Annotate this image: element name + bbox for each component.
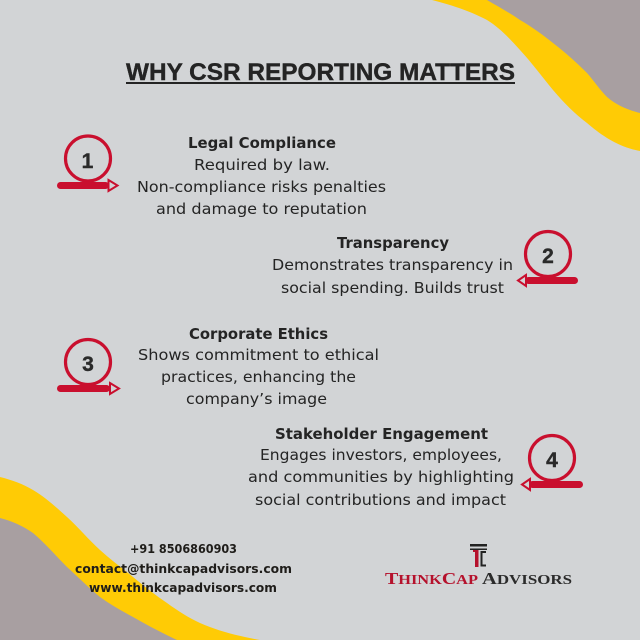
item 4 text: stakeholder engagement: Engages investors, employees, <box>260 446 502 464</box>
item 1 icon: numbered circle with right arrow: 1 <box>82 150 94 173</box>
item 4 text: stakeholder engagement: and communities by highlighting <box>248 468 514 486</box>
contact details: +91 8506860903 <box>130 542 237 556</box>
item 2 text: transparency: Demonstrates transparency in <box>272 256 513 274</box>
logo: ThinkCap Advisors <box>385 544 572 588</box>
icon: logo mark <box>470 544 487 567</box>
item 1 text: legal compliance: Non-compliance risks penalties <box>137 178 386 196</box>
item 2 text: transparency: Transparency <box>337 234 449 252</box>
item 1 text: legal compliance: Legal Compliance <box>188 134 336 152</box>
contact details: www.thinkcapadvisors.com <box>89 581 277 595</box>
item 4 text: stakeholder engagement: social contributions and impact <box>255 491 506 509</box>
item 3 text: corporate ethics: Corporate Ethics <box>189 325 328 343</box>
item 1 text: legal compliance: and damage to reputation <box>156 200 367 218</box>
title: WHY CSR REPORTING MATTERS <box>126 59 515 86</box>
item 1 icon: numbered circle with right arrow <box>57 136 118 191</box>
item 4 text: stakeholder engagement <box>248 425 514 509</box>
contact details: contact@thinkcapadvisors.com <box>75 562 292 576</box>
contact details <box>75 542 292 595</box>
item 2 text: transparency: social spending. Builds trust <box>281 279 504 297</box>
decoration: bottom-left wave <box>0 477 260 640</box>
item 1 text: legal compliance <box>137 134 386 218</box>
item 3 text: corporate ethics: company’s image <box>186 390 327 408</box>
item 3 icon: numbered circle with right arrow: 3 <box>82 353 94 376</box>
item 3 text: corporate ethics: practices, enhancing the <box>161 368 356 386</box>
item 2 text: transparency <box>272 234 513 297</box>
item 3 icon: numbered circle with right arrow <box>57 340 119 394</box>
item 3 text: corporate ethics: Shows commitment to ethical <box>138 346 379 364</box>
item 4 icon: numbered circle with left arrow <box>522 436 583 490</box>
item 2 icon: numbered circle with left arrow <box>518 232 578 286</box>
item 2 icon: numbered circle with left arrow: 2 <box>542 245 554 268</box>
decoration: top-right wave <box>432 0 640 151</box>
logo: ThinkCap Advisors: ADVISORS <box>482 569 572 588</box>
item 4 icon: numbered circle with left arrow: 4 <box>546 449 558 472</box>
item 4 text: stakeholder engagement: Stakeholder Engagement <box>275 425 489 443</box>
item 1 text: legal compliance: Required by law. <box>194 156 330 174</box>
item 3 text: corporate ethics <box>138 325 379 408</box>
logo wordmark: THINK CAP <box>385 569 479 588</box>
